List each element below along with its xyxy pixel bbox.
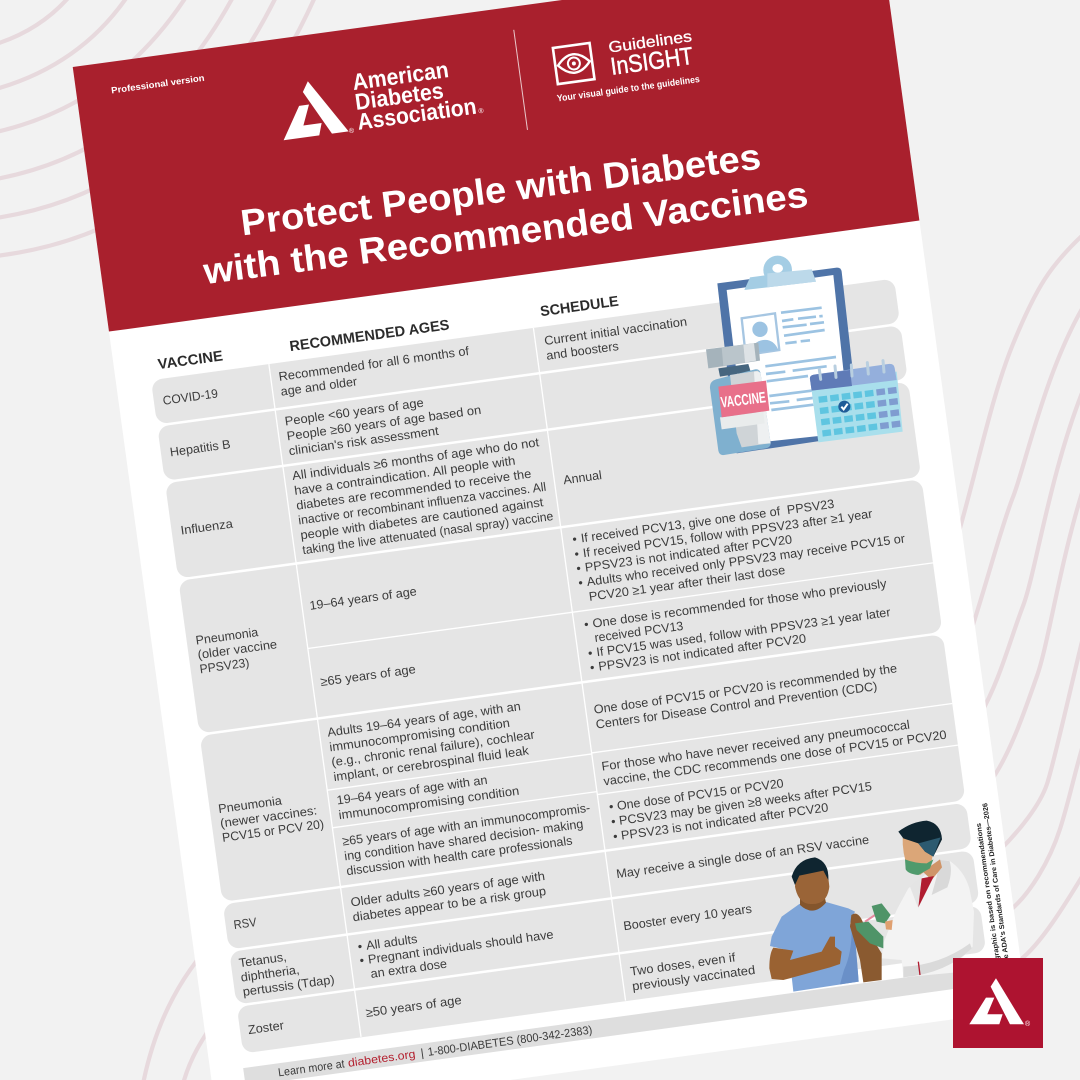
footer contact line: diabetes.org bbox=[347, 1049, 416, 1070]
row: RSV: diabetes appear to be a risk group bbox=[352, 884, 547, 924]
row: Influenza: taking the live attenuated (nasal spray) vaccine bbox=[301, 509, 554, 557]
footer band bbox=[243, 966, 994, 1080]
background wave lines: bottom left bbox=[143, 945, 220, 1080]
row: Influenza: inactive or recombinant influenza vaccines. All bbox=[297, 480, 547, 528]
row: Tdap: All adults bbox=[365, 932, 418, 953]
vial: VACCINE bbox=[720, 389, 767, 412]
header band bbox=[73, 0, 919, 332]
row: RSV: Older adults ≥60 years of age with bbox=[350, 869, 546, 909]
row: Pneumonia older vaccine: PPSV23 is not indicated after PCV20 bbox=[598, 631, 807, 674]
row: Pneumonia newer vaccines: immunocompromising condition bbox=[329, 716, 511, 754]
row: Pneumonia older vaccine: Pneumonia bbox=[195, 625, 259, 648]
row: Pneumonia older vaccine: • bbox=[587, 646, 593, 660]
row: Pneumonia older vaccine: PPSV23 is not indicated after PCV20 bbox=[584, 532, 793, 575]
row: Pneumonia newer vaccines: One dose of PCV15 or PCV20 is recommended by the bbox=[593, 661, 898, 717]
row: Hepatitis B: People ≥60 years of age based on bbox=[286, 403, 482, 443]
row: Pneumonia newer vaccines: vaccine, the CDC recommends one dose of PCV15 or PCV20 bbox=[603, 728, 947, 789]
illustration: patient receiving a vaccine from a doctor bbox=[769, 821, 974, 992]
professional version label: Professional version bbox=[111, 73, 205, 95]
patient bbox=[769, 857, 882, 992]
row: Pneumonia newer vaccines: immunocompromising condition bbox=[338, 784, 520, 822]
row: Pneumonia newer vaccines: • bbox=[610, 814, 616, 829]
Guidelines InSIGHT wordmark: InSIGHT bbox=[609, 43, 695, 81]
row: Tdap: Booster every 10 years bbox=[622, 902, 753, 933]
row: RSV bbox=[232, 825, 871, 940]
row: Pneumonia older vaccine bbox=[188, 488, 917, 727]
row: Tdap: pertussis (Tdap) bbox=[242, 973, 335, 999]
row: Pneumonia newer vaccines: • bbox=[608, 800, 614, 814]
row: Pneumonia older vaccine: • bbox=[583, 617, 589, 632]
row: Zoster: Zoster bbox=[247, 1018, 285, 1037]
row: Influenza: people with diabetes are cautioned against bbox=[299, 495, 545, 542]
profile card bbox=[742, 313, 779, 355]
calendar bbox=[810, 361, 903, 442]
row: COVID-19 bbox=[161, 314, 690, 415]
column headings: RECOMMENDED AGES bbox=[289, 317, 451, 355]
vial bbox=[706, 343, 771, 455]
row: Hepatitis B: clinician's risk assessment bbox=[288, 424, 440, 458]
row: Zoster bbox=[246, 948, 756, 1046]
row: Pneumonia older vaccine: If PCV15 was used, follow with PPSV23 ≥1 year later bbox=[596, 605, 891, 659]
row: Tdap: diphtheria, bbox=[240, 963, 300, 985]
title: with the Recommended Vaccines bbox=[200, 174, 810, 292]
footer contact line: Learn more at bbox=[277, 1058, 346, 1079]
row: Hepatitis B: Hepatitis B bbox=[169, 437, 231, 459]
row: Pneumonia older vaccine: • bbox=[572, 532, 578, 547]
row: RSV: May receive a single dose of an RSV vaccine bbox=[615, 833, 870, 881]
row: COVID-19: age and older bbox=[280, 374, 358, 399]
row: Pneumonia older vaccine: • bbox=[574, 547, 580, 561]
row: Pneumonia newer vaccines: PCV15 or PCV 20) bbox=[221, 817, 325, 845]
column headings: VACCINE bbox=[157, 348, 224, 373]
row: Pneumonia newer vaccines: ≥65 years of age with an immunocompromis- bbox=[341, 801, 591, 849]
row: COVID-19: Recommended for all 6 months of bbox=[278, 344, 470, 384]
column headings: SCHEDULE bbox=[539, 294, 620, 320]
Guidelines InSIGHT wordmark: Guidelines bbox=[607, 28, 693, 57]
header divider bbox=[514, 30, 527, 130]
row: Pneumonia older vaccine: Adults who received only PPSV23 may receive PCV15 or bbox=[586, 532, 906, 589]
row: Influenza: Annual bbox=[562, 468, 603, 487]
title bbox=[194, 130, 810, 292]
ADA wordmark: ® bbox=[478, 107, 485, 115]
row: Pneumonia older vaccine: ≥65 years of age bbox=[320, 662, 417, 689]
row: Influenza bbox=[174, 427, 607, 573]
row: Pneumonia older vaccine: If received PCV15, follow with PPSV23 after ≥1 year bbox=[582, 507, 873, 560]
row: Tdap: an extra dose bbox=[370, 957, 448, 981]
row: Pneumonia newer vaccines: PCSV23 may be given ≥8 weeks after PCV15 bbox=[618, 779, 873, 828]
row: COVID-19: and boosters bbox=[545, 339, 620, 363]
row: Tdap bbox=[238, 886, 755, 999]
row: Pneumonia newer vaccines: discussion with health care professionals bbox=[345, 833, 573, 878]
row: Pneumonia newer vaccines: Pneumonia bbox=[217, 793, 283, 816]
row: Tdap: Tetanus, bbox=[238, 950, 287, 970]
corner ADA logo: ® bbox=[1025, 1020, 1031, 1028]
gloved hands and syringe bbox=[855, 903, 893, 948]
row: Pneumonia older vaccine: One dose is recommended for those who previously bbox=[592, 576, 888, 631]
row: Pneumonia newer vaccines: For those who have never received any pneumococcal bbox=[601, 718, 911, 774]
row: Hepatitis B: People <60 years of age bbox=[284, 396, 425, 428]
row: Pneumonia older vaccine: received PCV13 bbox=[594, 619, 684, 645]
row: Tdap: • bbox=[357, 939, 363, 954]
row: Pneumonia newer vaccines: ing condition have shared decision- making bbox=[343, 817, 584, 863]
row: Pneumonia newer vaccines: 19–64 years of age with an bbox=[336, 773, 488, 807]
source note, vertical: This infographic is based on recommendations bbox=[976, 822, 1006, 992]
source note, vertical bbox=[973, 802, 1015, 992]
row: Pneumonia older vaccine: (older vaccine bbox=[197, 637, 278, 662]
row: Pneumonia newer vaccines: Adults 19–64 years of age, with an bbox=[326, 699, 522, 740]
ADA wordmark bbox=[341, 52, 485, 136]
row: Pneumonia older vaccine: PPSV23) bbox=[199, 656, 250, 676]
row: Pneumonia newer vaccines: One dose of PCV15 or PCV20 bbox=[616, 776, 785, 813]
row: Zoster: ≥50 years of age bbox=[365, 993, 462, 1020]
row: Pneumonia newer vaccines bbox=[209, 642, 955, 896]
Guidelines InSIGHT wordmark: Your visual guide to the guidelines bbox=[556, 74, 700, 105]
row: COVID-19: Current initial vaccination bbox=[543, 315, 688, 348]
row: Pneumonia newer vaccines: implant, or cerebrospinal fluid leak bbox=[333, 743, 530, 784]
background wave lines: top left bbox=[0, 0, 315, 256]
ADA wordmark: Diabetes bbox=[353, 77, 445, 115]
icon: Guidelines InSIGHT eye bbox=[553, 43, 594, 84]
row: Pneumonia older vaccine: 19–64 years of age bbox=[309, 584, 418, 613]
footer contact line: | bbox=[420, 1048, 425, 1060]
footer contact line bbox=[277, 1024, 593, 1079]
row: Pneumonia older vaccine: • bbox=[576, 561, 582, 576]
row: Zoster: previously vaccinated bbox=[631, 963, 756, 994]
Guidelines InSIGHT wordmark bbox=[550, 28, 700, 105]
row: Tdap: • bbox=[359, 953, 365, 968]
table row backgrounds bbox=[151, 279, 986, 1054]
background wave lines: right bbox=[955, 232, 1080, 960]
row: Influenza: diabetes are recommended to receive the bbox=[295, 467, 532, 513]
row: Tdap: Pregnant individuals should have bbox=[367, 927, 554, 967]
row: Pneumonia newer vaccines: (newer vaccines: bbox=[219, 803, 318, 830]
row: Pneumonia older vaccine: • bbox=[589, 660, 595, 675]
row: Pneumonia older vaccine: • bbox=[578, 576, 584, 590]
row: Pneumonia older vaccine: If received PCV13, give one dose of PPSV23 bbox=[580, 497, 835, 545]
row: Pneumonia newer vaccines: • bbox=[612, 829, 618, 844]
row: Influenza: have a contraindication. All people with bbox=[293, 454, 516, 498]
clipboard clip bbox=[744, 256, 816, 290]
doctor bbox=[882, 821, 974, 977]
row: Influenza: All individuals ≥6 months of age who do not bbox=[291, 435, 540, 483]
clipboard paper bbox=[727, 275, 850, 444]
illustration: clipboard, vaccine vial and calendar bbox=[706, 256, 903, 455]
row: Pneumonia older vaccine: PCV20 ≥1 year after their last dose bbox=[588, 563, 786, 604]
ADA wordmark: ® bbox=[348, 126, 355, 135]
corner ADA logo bbox=[953, 958, 1043, 1048]
row: Hepatitis B bbox=[167, 388, 484, 474]
row: Pneumonia newer vaccines: (e.g., chronic renal failure), cochlear bbox=[331, 728, 536, 769]
ADA wordmark: Association bbox=[356, 93, 478, 135]
table dividers bbox=[269, 279, 986, 1037]
row: RSV: RSV bbox=[233, 915, 258, 932]
clipboard board bbox=[717, 268, 860, 453]
ADA wordmark: American bbox=[351, 56, 450, 95]
row: Pneumonia newer vaccines: Centers for Disease Control and Prevention (CDC) bbox=[595, 679, 878, 732]
title: Protect People with Diabetes bbox=[238, 136, 763, 243]
row: Zoster: Two doses, even if bbox=[629, 950, 737, 979]
icon: ADA logo mark bbox=[276, 77, 349, 140]
document text lines bbox=[765, 308, 836, 410]
source note, vertical: from the ADA's Standards of Care in Diabetes—2026 bbox=[982, 802, 1014, 984]
footer contact line: 1-800-DIABETES (800-342-2383) bbox=[427, 1024, 593, 1059]
column headings bbox=[157, 294, 620, 373]
row: Influenza: Influenza bbox=[180, 517, 234, 538]
row: COVID-19: COVID-19 bbox=[162, 386, 219, 408]
row: Pneumonia newer vaccines: PPSV23 is not indicated after PCV20 bbox=[620, 800, 829, 843]
